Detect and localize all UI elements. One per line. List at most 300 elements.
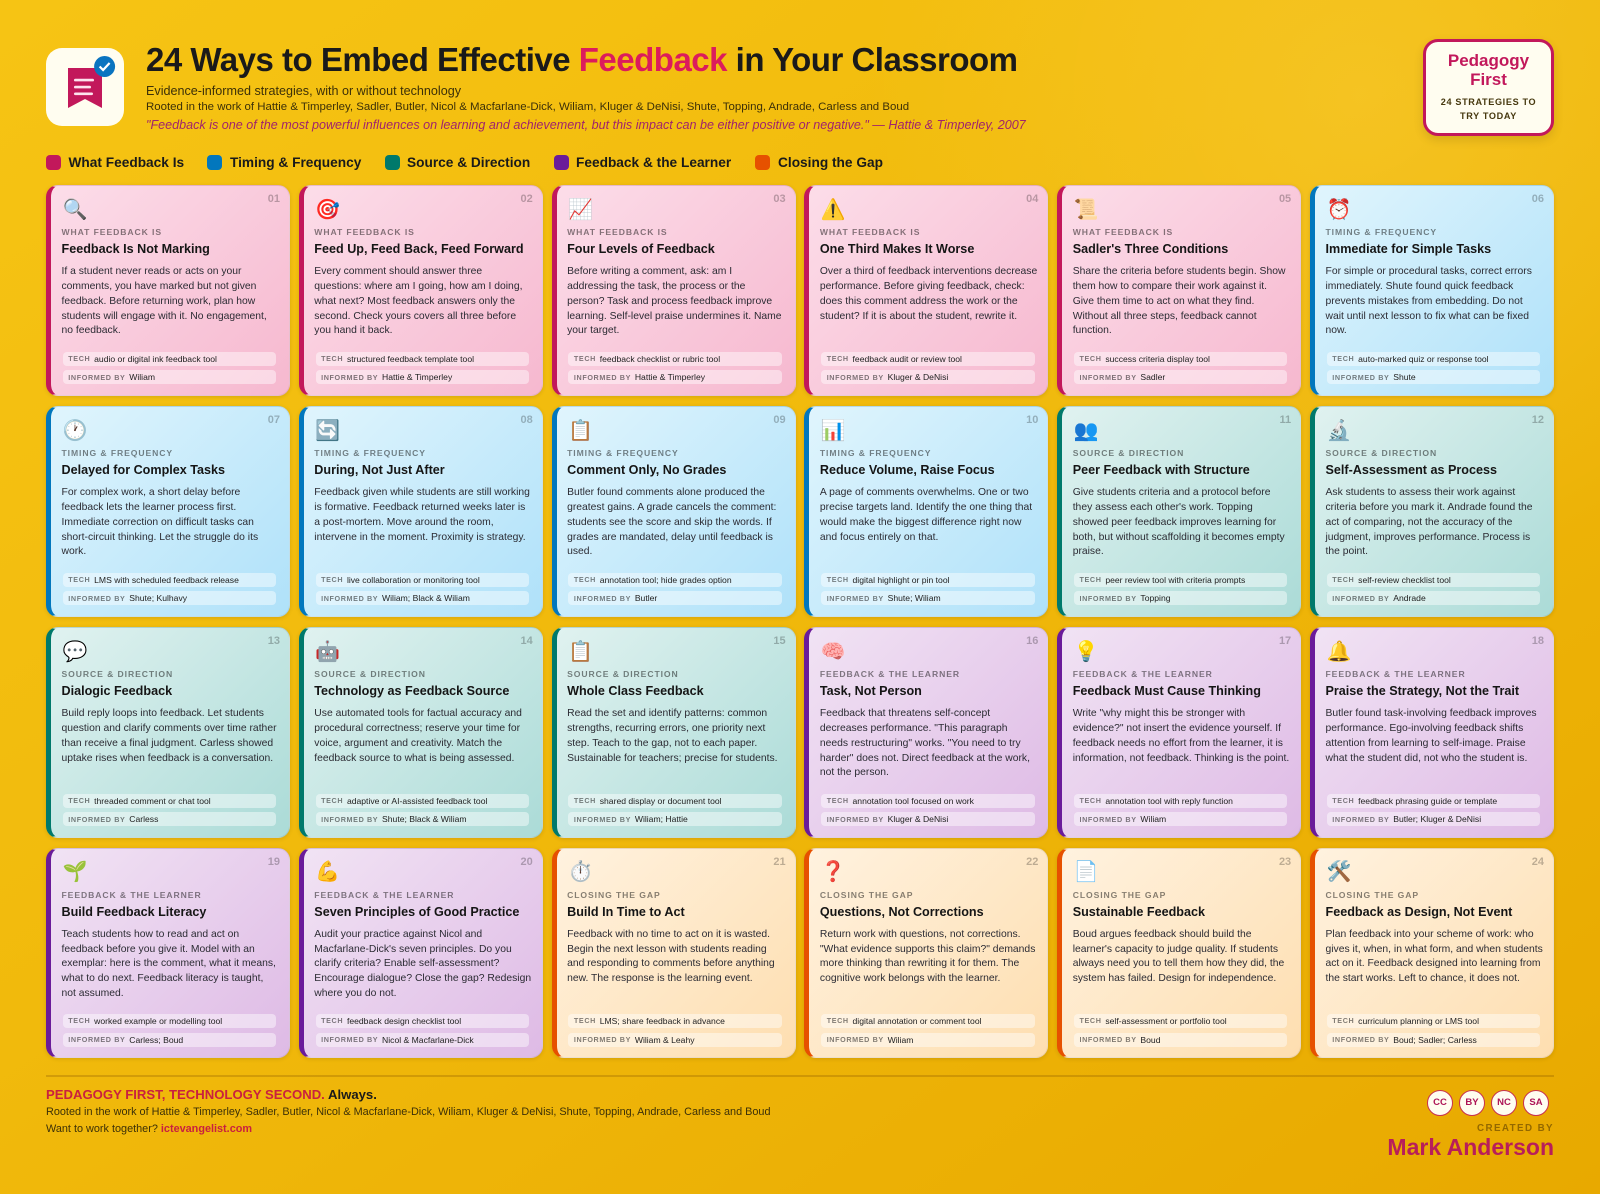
informed by tag [1327, 812, 1540, 826]
heading: One Third Makes It Worse [820, 242, 974, 256]
body: a post-mortem. Move around the room, [314, 517, 494, 528]
number: 18 [1532, 635, 1544, 647]
body: the start works. Left to chance, it does not. [1326, 973, 1520, 984]
informed by tag [63, 812, 276, 826]
body: Write "why might this be stronger with [1073, 708, 1245, 719]
card 02 [299, 185, 543, 396]
number: 01 [268, 193, 280, 205]
body: immediately. Shute found quick feedback [1326, 281, 1513, 292]
card 24 [1310, 848, 1554, 1058]
tech tag: TECH feedback design checklist tool [321, 1016, 461, 1026]
card 11 [1057, 406, 1301, 616]
informed by tag: INFORMED BY Butler [574, 593, 657, 603]
informed by tag: INFORMED BY Boud [1079, 1035, 1160, 1045]
body [314, 487, 530, 543]
CC: CC [1433, 1097, 1447, 1108]
body [62, 929, 276, 999]
number: 22 [1026, 856, 1038, 868]
tech tag [1327, 573, 1540, 587]
tech tag [1327, 352, 1540, 366]
body: evidence?" not insert the evidence yourself. If [1073, 723, 1281, 734]
body: strengths, recurring errors, one priority next [567, 723, 765, 734]
category: SOURCE & DIRECTION [314, 669, 426, 679]
body: Without all three steps, feedback cannot [1073, 311, 1257, 322]
body: precise targets land. Identify the one thing that [820, 502, 1032, 513]
body: and responding to comments before anything [567, 958, 775, 969]
body: Over a third of feedback interventions decrease [820, 266, 1037, 277]
body [1326, 266, 1532, 336]
informed by tag: INFORMED BY Kluger & DeNisi [827, 814, 948, 824]
body: gives it, when, in what form, and when students [1326, 944, 1543, 955]
legend label: Timing & Frequency: Timing & Frequency [230, 155, 361, 170]
tech tag: TECH feedback phrasing guide or template [1332, 796, 1497, 806]
icon: 🧠 [821, 638, 846, 662]
informed by tag: INFORMED BY Butler; Kluger & DeNisi [1332, 814, 1481, 824]
card 23 [1057, 848, 1301, 1058]
informed by tag: INFORMED BY Boud; Sadler; Carless [1332, 1035, 1477, 1045]
created by: CREATED BY [1477, 1122, 1554, 1134]
tech tag [63, 352, 276, 366]
body: feedback needs no effort from the learner, it is [1073, 738, 1283, 749]
legend: Closing the Gap [755, 155, 770, 170]
body: used. [567, 546, 592, 557]
category: TIMING & FREQUENCY [820, 448, 931, 458]
informed by tag [316, 812, 529, 826]
body: Ask students to assess their work against [1326, 487, 1515, 498]
number: 09 [773, 414, 786, 426]
icon: 💪 [315, 859, 340, 883]
body: Begin the next lesson with students reading [567, 944, 767, 955]
legend label: Source & Direction: Source & Direction [407, 155, 530, 170]
icon: 📈 [568, 196, 593, 220]
card 21 [552, 848, 796, 1058]
card 13 [46, 627, 290, 838]
category: CLOSING THE GAP [1073, 890, 1166, 900]
number: 10 [1026, 414, 1038, 426]
tech tag [63, 794, 276, 808]
number: 08 [521, 414, 533, 426]
body: always need you to tell them how they did, the [1073, 958, 1284, 969]
category: FEEDBACK & THE LEARNER [314, 890, 454, 900]
informed by tag: INFORMED BY Topping [1079, 593, 1171, 603]
legend label: Feedback & the Learner: Feedback & the Learner [576, 155, 731, 170]
body: system has failed. Design for independence. [1073, 973, 1276, 984]
heading: Comment Only, No Grades [567, 463, 726, 477]
informed by tag: INFORMED BY Wiliam; Black & Wiliam [321, 593, 470, 603]
body [1326, 708, 1537, 764]
body: no feedback. [62, 325, 121, 336]
category: TIMING & FREQUENCY [567, 448, 679, 458]
body: both, but without scaffolding it becomes empty [1073, 532, 1285, 543]
informed by tag: INFORMED BY Andrade [1332, 593, 1426, 603]
body: Give students criteria and a protocol before [1073, 487, 1270, 498]
body: greatest gains. A grade cancels the comment: [567, 502, 776, 513]
body [567, 266, 782, 336]
legend: Source & Direction [385, 155, 400, 170]
body: voice, argument and creativity. Match the [314, 738, 502, 749]
heading: Feedback as Design, Not Event [1326, 905, 1512, 919]
legend: Feedback & the Learner [554, 155, 569, 170]
icon: 🔍 [62, 196, 87, 220]
body: more thinking than rewriting it for them. The [820, 958, 1019, 969]
number: 20 [521, 856, 533, 868]
NC [1491, 1090, 1517, 1116]
body: comments, you have marked but not given [62, 281, 256, 292]
number: 16 [1026, 635, 1038, 647]
tech tag: TECH adaptive or AI-assisted feedback tool [321, 796, 487, 806]
body [820, 487, 1032, 543]
heading: Peer Feedback with Structure [1073, 463, 1250, 477]
body: Audit your practice against Nicol and [314, 929, 482, 940]
body: Boud argues feedback should build the [1073, 929, 1252, 940]
icon: 📜 [1074, 196, 1099, 220]
heading: Build Feedback Literacy [62, 905, 206, 919]
body [820, 929, 1036, 984]
informed by tag: INFORMED BY Shute [1332, 372, 1416, 382]
tech tag [316, 352, 529, 366]
category: WHAT FEEDBACK IS [1073, 227, 1173, 237]
body: would make the biggest difference right now [820, 517, 1022, 528]
heading: Dialogic Feedback [62, 684, 172, 698]
body: what the student did, not who the student is. [1326, 753, 1527, 764]
heading: During, Not Just After [314, 463, 445, 477]
body: feedback before you give it. Model with an [62, 944, 255, 955]
tech tag [1327, 1014, 1540, 1028]
informed by tag: INFORMED BY Wiliam; Hattie [574, 814, 688, 824]
heading: Four Levels of Feedback [567, 242, 715, 256]
body: is formative. Feedback returned weeks later is [314, 502, 525, 513]
number: 24 [1532, 856, 1544, 868]
tech tag: TECH LMS with scheduled feedback release [68, 575, 239, 585]
informed by tag [1074, 812, 1287, 826]
icon: ❓ [821, 859, 846, 883]
heading: Feedback Must Cause Thinking [1073, 684, 1261, 698]
tech tag [821, 352, 1035, 366]
informed by tag: INFORMED BY Shute; Wiliam [827, 593, 941, 603]
category: WHAT FEEDBACK IS [820, 227, 920, 237]
body: Immediate correction on difficult tasks can [62, 517, 254, 528]
category: FEEDBACK & THE LEARNER [1073, 669, 1213, 679]
informed by tag: INFORMED BY Shute; Kulhavy [68, 593, 187, 603]
body: harder" does not. Direct feedback at the work, [820, 753, 1030, 764]
card 03 [552, 185, 796, 396]
body [1325, 487, 1532, 557]
body: Macfarlane-Dick's seven principles. Do you [314, 944, 512, 955]
icon: 🔬 [1326, 418, 1351, 442]
informed by tag: INFORMED BY Carless; Boud [68, 1035, 183, 1045]
legend: Timing & Frequency [207, 155, 222, 170]
tech tag: TECH curriculum planning or LMS tool [1332, 1016, 1479, 1026]
body: short-circuit thinking. Let the struggle do its [62, 532, 258, 543]
card 09 [552, 406, 796, 616]
body: Feedback with no time to act on it is wasted. [567, 929, 770, 940]
informed by tag: INFORMED BY Hattie & Timperley [574, 372, 705, 382]
informed by tag [821, 591, 1035, 605]
tech tag: TECH self-assessment or portfolio tool [1079, 1016, 1227, 1026]
informed by tag [1327, 370, 1540, 384]
icon: 🌱 [62, 859, 87, 883]
body [820, 708, 1030, 778]
icon: 💡 [1074, 638, 1099, 662]
body [1073, 929, 1284, 984]
number: 11 [1280, 414, 1291, 426]
heading: Feed Up, Feed Back, Feed Forward [314, 242, 524, 256]
author name: Mark Anderson [1387, 1134, 1554, 1160]
body: and focus entirely on that. [820, 532, 938, 543]
body: For complex work, a short delay before [62, 487, 240, 498]
informed by tag [316, 1033, 529, 1047]
heading: Build In Time to Act [567, 905, 685, 919]
card 12 [1310, 406, 1554, 616]
number: 12 [1532, 414, 1544, 426]
informed by tag [63, 370, 276, 384]
number: 21 [773, 856, 786, 868]
footer tagline: PEDAGOGY FIRST, TECHNOLOGY SECOND. Always. [46, 1087, 377, 1102]
card 07 [46, 406, 290, 616]
body: judgment, improves performance. Process is [1326, 532, 1530, 543]
body: uptake rises when feedback is a conversation. [62, 753, 273, 764]
card 18 [1310, 627, 1554, 838]
category: SOURCE & DIRECTION [1073, 448, 1184, 458]
icon: 📄 [1074, 859, 1099, 883]
tech tag [1074, 573, 1287, 587]
category: SOURCE & DIRECTION [62, 669, 173, 679]
body: clarify criteria? Enable self-assessment? [314, 958, 499, 969]
body: student? If it is about the student, rewrite it. [820, 311, 1017, 322]
body: you hand it back. [314, 325, 393, 336]
heading: Delayed for Complex Tasks [62, 463, 225, 477]
informed by tag [63, 1033, 276, 1047]
icon: 📊 [821, 418, 846, 442]
body: questions: where am I going, how am I doing, [314, 281, 522, 292]
body: Butler found task-involving feedback improves [1326, 708, 1537, 719]
body: showed peer feedback improves learning for [1073, 517, 1276, 528]
body: Sustainable for teachers; precise for students. [567, 753, 778, 764]
heading: Sadler's Three Conditions [1073, 242, 1228, 256]
body: "What evidence supports this claim?" demands [820, 944, 1035, 955]
tech tag [1327, 794, 1540, 808]
icon: 🔄 [315, 418, 340, 442]
badge: Pedagogy First: First [1470, 70, 1507, 89]
body: act of comparing, not the accuracy of the [1326, 517, 1512, 528]
tech tag: TECH LMS; share feedback in advance [574, 1016, 725, 1026]
badge: Pedagogy First: TRY TODAY [1460, 111, 1517, 121]
informed by tag [568, 812, 782, 826]
informed by tag [1327, 1033, 1540, 1047]
informed by tag [821, 370, 1035, 384]
category: WHAT FEEDBACK IS [567, 227, 668, 237]
informed by tag [316, 370, 529, 384]
tech tag: TECH annotation tool with reply function [1079, 796, 1233, 806]
body: feedback source to what is being assessed. [314, 753, 514, 764]
icon: ⚠️ [821, 196, 846, 220]
body: addressing the task, the process or the [567, 281, 745, 292]
number: 19 [268, 856, 280, 868]
badge: Pedagogy First [1423, 39, 1554, 136]
body [314, 929, 531, 999]
informed by tag [1327, 591, 1540, 605]
icon: 🔔 [1326, 638, 1351, 662]
card 04 [804, 185, 1048, 396]
body: Feedback that threatens self-concept [820, 708, 990, 719]
tech tag: TECH success criteria display tool [1079, 354, 1210, 364]
informed by tag [63, 591, 276, 605]
body: intervene in the moment. Proximity is strategy. [314, 532, 526, 543]
body: Return work with questions, not corrections. [820, 929, 1021, 940]
tech tag: TECH digital annotation or comment tool [827, 1016, 982, 1026]
icon: 🕐 [62, 418, 87, 442]
body: Use automated tools for factual accuracy and [314, 708, 522, 719]
card 19 [46, 848, 290, 1058]
body: Encourage dialogue? Close the gap? Redesign [314, 973, 531, 984]
subtitle: Evidence-informed strategies, with or without technology [146, 84, 461, 98]
body [1072, 708, 1289, 764]
icon: 🛠️ [1326, 859, 1351, 883]
tech tag [316, 1014, 529, 1028]
body: criteria before you mark it. Andrade found the [1326, 502, 1532, 513]
informed by tag: INFORMED BY Carless [68, 814, 158, 824]
body: not the person. [820, 767, 889, 778]
informed by tag: INFORMED BY Sadler [1079, 372, 1165, 382]
body: second. Check yours covers all three before [314, 311, 516, 322]
tech tag: TECH annotation tool focused on work [827, 796, 974, 806]
card 06 [1310, 185, 1554, 396]
tech tag [1074, 352, 1287, 366]
body [314, 708, 522, 764]
body: students will engage with it. No engagement, [62, 311, 267, 322]
category: WHAT FEEDBACK IS [314, 227, 415, 237]
tech tag: TECH threaded comment or chat tool [68, 796, 211, 806]
body [567, 487, 776, 557]
body [314, 266, 522, 336]
body: Every comment should answer three [314, 266, 482, 277]
tech tag: TECH worked example or modelling tool [68, 1016, 222, 1026]
body: Feedback given while students are still working [314, 487, 530, 498]
number: 04 [1026, 193, 1038, 205]
card 05 [1057, 185, 1301, 396]
body [1072, 266, 1286, 336]
tech tag [568, 794, 782, 808]
body: feedback. Before returning work, plan how [62, 296, 255, 307]
category: CLOSING THE GAP [1326, 890, 1419, 900]
icon: 📋 [568, 418, 593, 442]
heading: Self-Assessment as Process [1326, 463, 1497, 477]
tech tag [1074, 1014, 1287, 1028]
heading: Technology as Feedback Source [314, 684, 509, 698]
body [1326, 929, 1543, 984]
number: 05 [1279, 193, 1291, 205]
icon: 💬 [62, 638, 87, 662]
informed by tag: INFORMED BY Wiliam [1079, 814, 1166, 824]
body: Plan feedback into your scheme of work: who [1326, 929, 1534, 940]
body: feedback lets the learner process first. [62, 502, 236, 513]
body [1072, 487, 1285, 557]
tech tag [568, 352, 782, 366]
footer research line: Rooted in the work of Hattie & Timperley, Sadler, Butler, Nicol & Macfarlane-Dick, Wiliam, Kluger & DeNisi, Shute, Topping, Andrade, Carless and Boud [46, 1106, 770, 1118]
body: function. [1073, 325, 1112, 336]
body: information, not feedback. Thinking is the point. [1073, 753, 1289, 764]
icon: 🎯 [315, 196, 340, 220]
body: performance. Before giving feedback, check: [820, 281, 1025, 292]
body: performance. Ego-involving feedback shifts [1326, 723, 1523, 734]
heading: Reduce Volume, Raise Focus [820, 463, 995, 477]
card 10 [804, 406, 1048, 616]
body: needs restructuring" works. "You need to try [820, 738, 1021, 749]
tech tag [821, 794, 1035, 808]
informed by tag [568, 591, 782, 605]
icon: 👥 [1074, 418, 1099, 442]
informed by tag [1074, 370, 1287, 384]
icon: ⏱️ [568, 859, 593, 883]
body: If a student never reads or acts on your [62, 266, 241, 277]
body: Teach students how to read and act on [62, 929, 239, 940]
body: cognitive work belongs with the learner. [820, 973, 1000, 984]
NC: NC [1497, 1097, 1511, 1108]
heading: Questions, Not Corrections [820, 905, 984, 919]
badge: Pedagogy First: 24 STRATEGIES TO [1441, 97, 1536, 107]
body: prevents mistakes from embedding. Do not [1326, 296, 1523, 307]
number: 23 [1279, 856, 1291, 868]
body: Butler found comments alone produced the [567, 487, 765, 498]
body: what next? Most feedback answers only the [314, 296, 515, 307]
body: than receive a final judgment. Carless showed [62, 738, 273, 749]
SA [1523, 1090, 1549, 1116]
research line: Rooted in the work of Hattie & Timperley, Sadler, Butler, Nicol & Macfarlane-Dick, Wiliam, Kluger & DeNisi, Shute, Topping, Andrade, Carless and Boud [146, 101, 909, 113]
tech tag: TECH live collaboration or monitoring tool [321, 575, 480, 585]
body: praise. [1073, 546, 1104, 557]
category: SOURCE & DIRECTION [567, 669, 679, 679]
card 15 [552, 627, 796, 838]
number: 14 [521, 635, 533, 647]
tech tag: TECH audio or digital ink feedback tool [68, 354, 217, 364]
category: WHAT FEEDBACK IS [62, 227, 162, 237]
informed by tag: INFORMED BY Nicol & Macfarlane-Dick [321, 1035, 474, 1045]
body: act on it. Feedback designed into learning from [1326, 958, 1541, 969]
tech tag: TECH auto-marked quiz or response tool [1332, 354, 1489, 364]
body: Read the set and identify patterns: common [567, 708, 767, 719]
card 20 [299, 848, 543, 1058]
body: question and clarify comments over time rather [62, 723, 277, 734]
informed by tag [1074, 1033, 1287, 1047]
heading: Praise the Strategy, Not the Trait [1326, 684, 1519, 698]
body [62, 487, 258, 557]
category: FEEDBACK & THE LEARNER [1326, 669, 1466, 679]
number: 03 [773, 193, 786, 205]
icon: 📋 [568, 638, 593, 662]
body [820, 266, 1037, 322]
tech tag [568, 573, 782, 587]
tech tag: TECH shared display or document tool [574, 796, 722, 806]
BY: BY [1465, 1097, 1479, 1108]
SA: SA [1529, 1097, 1543, 1108]
body: decreases performance. "This paragraph [820, 723, 1008, 734]
number: 06 [1532, 193, 1544, 205]
body: A page of comments overwhelms. One or two [820, 487, 1029, 498]
body [62, 708, 277, 764]
body: students see the score and skip the words. If [567, 517, 772, 528]
category: FEEDBACK & THE LEARNER [820, 669, 960, 679]
informed by tag: INFORMED BY Wiliam & Leahy [574, 1035, 695, 1045]
tech tag: TECH annotation tool; hide grades option [574, 575, 732, 585]
category: TIMING & FREQUENCY [62, 448, 173, 458]
body [567, 929, 775, 984]
footer contact: Want to work together? ictevangelist.com [46, 1123, 252, 1135]
body: Before writing a comment, ask: am I [567, 266, 732, 277]
body: now. [1326, 325, 1347, 336]
number: 17 [1279, 635, 1291, 647]
heading: Feedback Is Not Marking [62, 242, 210, 256]
body: new. The response is the learning event. [567, 973, 753, 984]
